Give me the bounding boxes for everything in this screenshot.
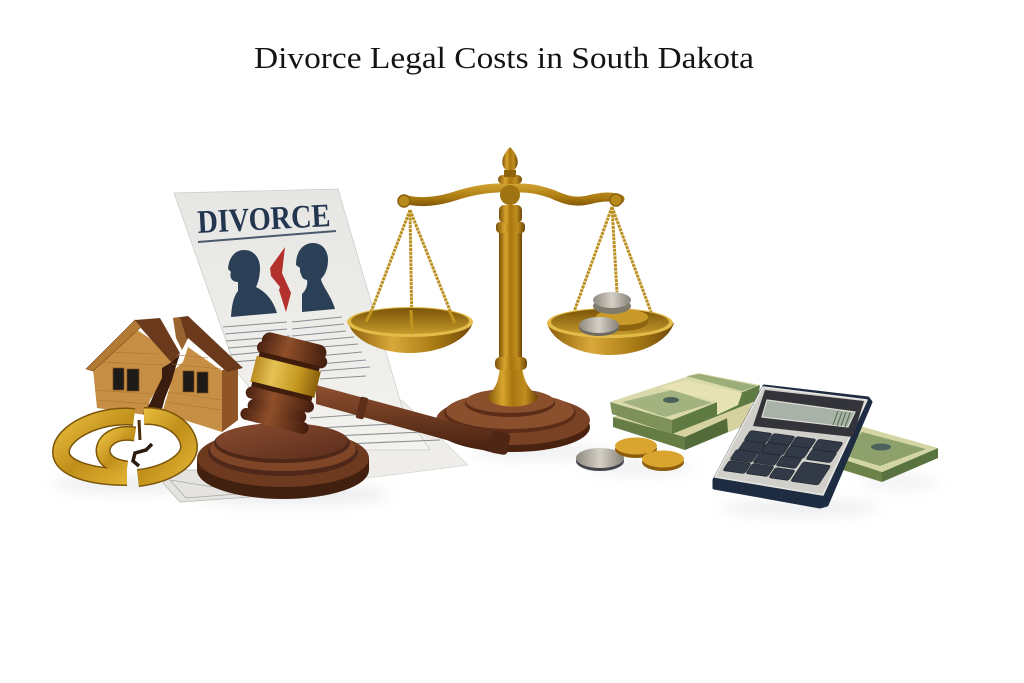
display panel [753, 390, 864, 437]
center boss and finial [498, 147, 522, 205]
title: Divorce Legal Costs in South Dakota [254, 40, 754, 75]
paper band [660, 380, 742, 415]
heading: DIVORCE: DIVORCE [197, 198, 331, 241]
beam end loops [398, 194, 622, 207]
icon: silhouettes with red crack [228, 243, 335, 317]
main sheet [174, 189, 430, 450]
column foot [487, 366, 538, 406]
icon: broken gold ring [61, 416, 189, 478]
right pan chains [570, 207, 657, 328]
calculator [714, 386, 871, 507]
divorce document [163, 189, 468, 502]
column shaft [499, 228, 522, 360]
icon: broken house [86, 316, 243, 432]
LCD [762, 400, 855, 427]
right half [162, 347, 222, 432]
column collars [495, 205, 527, 370]
crack [143, 354, 180, 416]
loose coins [576, 438, 684, 471]
keypad [723, 430, 843, 485]
coins in pan [579, 292, 648, 336]
cash stacks [610, 373, 938, 482]
lower stack [613, 398, 755, 450]
windows [113, 368, 208, 393]
left half [93, 328, 176, 415]
right stack [830, 426, 938, 482]
gavel sound block [197, 423, 369, 499]
left pan chains [368, 210, 455, 332]
beam [404, 188, 620, 202]
right pan [547, 308, 674, 355]
text lines [223, 317, 440, 444]
left pan [347, 307, 473, 353]
lower sheets [163, 400, 468, 502]
upper stack [610, 373, 760, 434]
gavel handle [316, 385, 511, 455]
wooden base [436, 389, 590, 452]
calculator body [714, 386, 871, 507]
gavel head [239, 330, 331, 436]
plank lines [95, 352, 221, 410]
balance scale [347, 147, 674, 452]
heading rule [198, 231, 336, 242]
left pan chain fronts [366, 310, 455, 333]
ground shadows [52, 446, 940, 515]
gold band [250, 356, 321, 398]
